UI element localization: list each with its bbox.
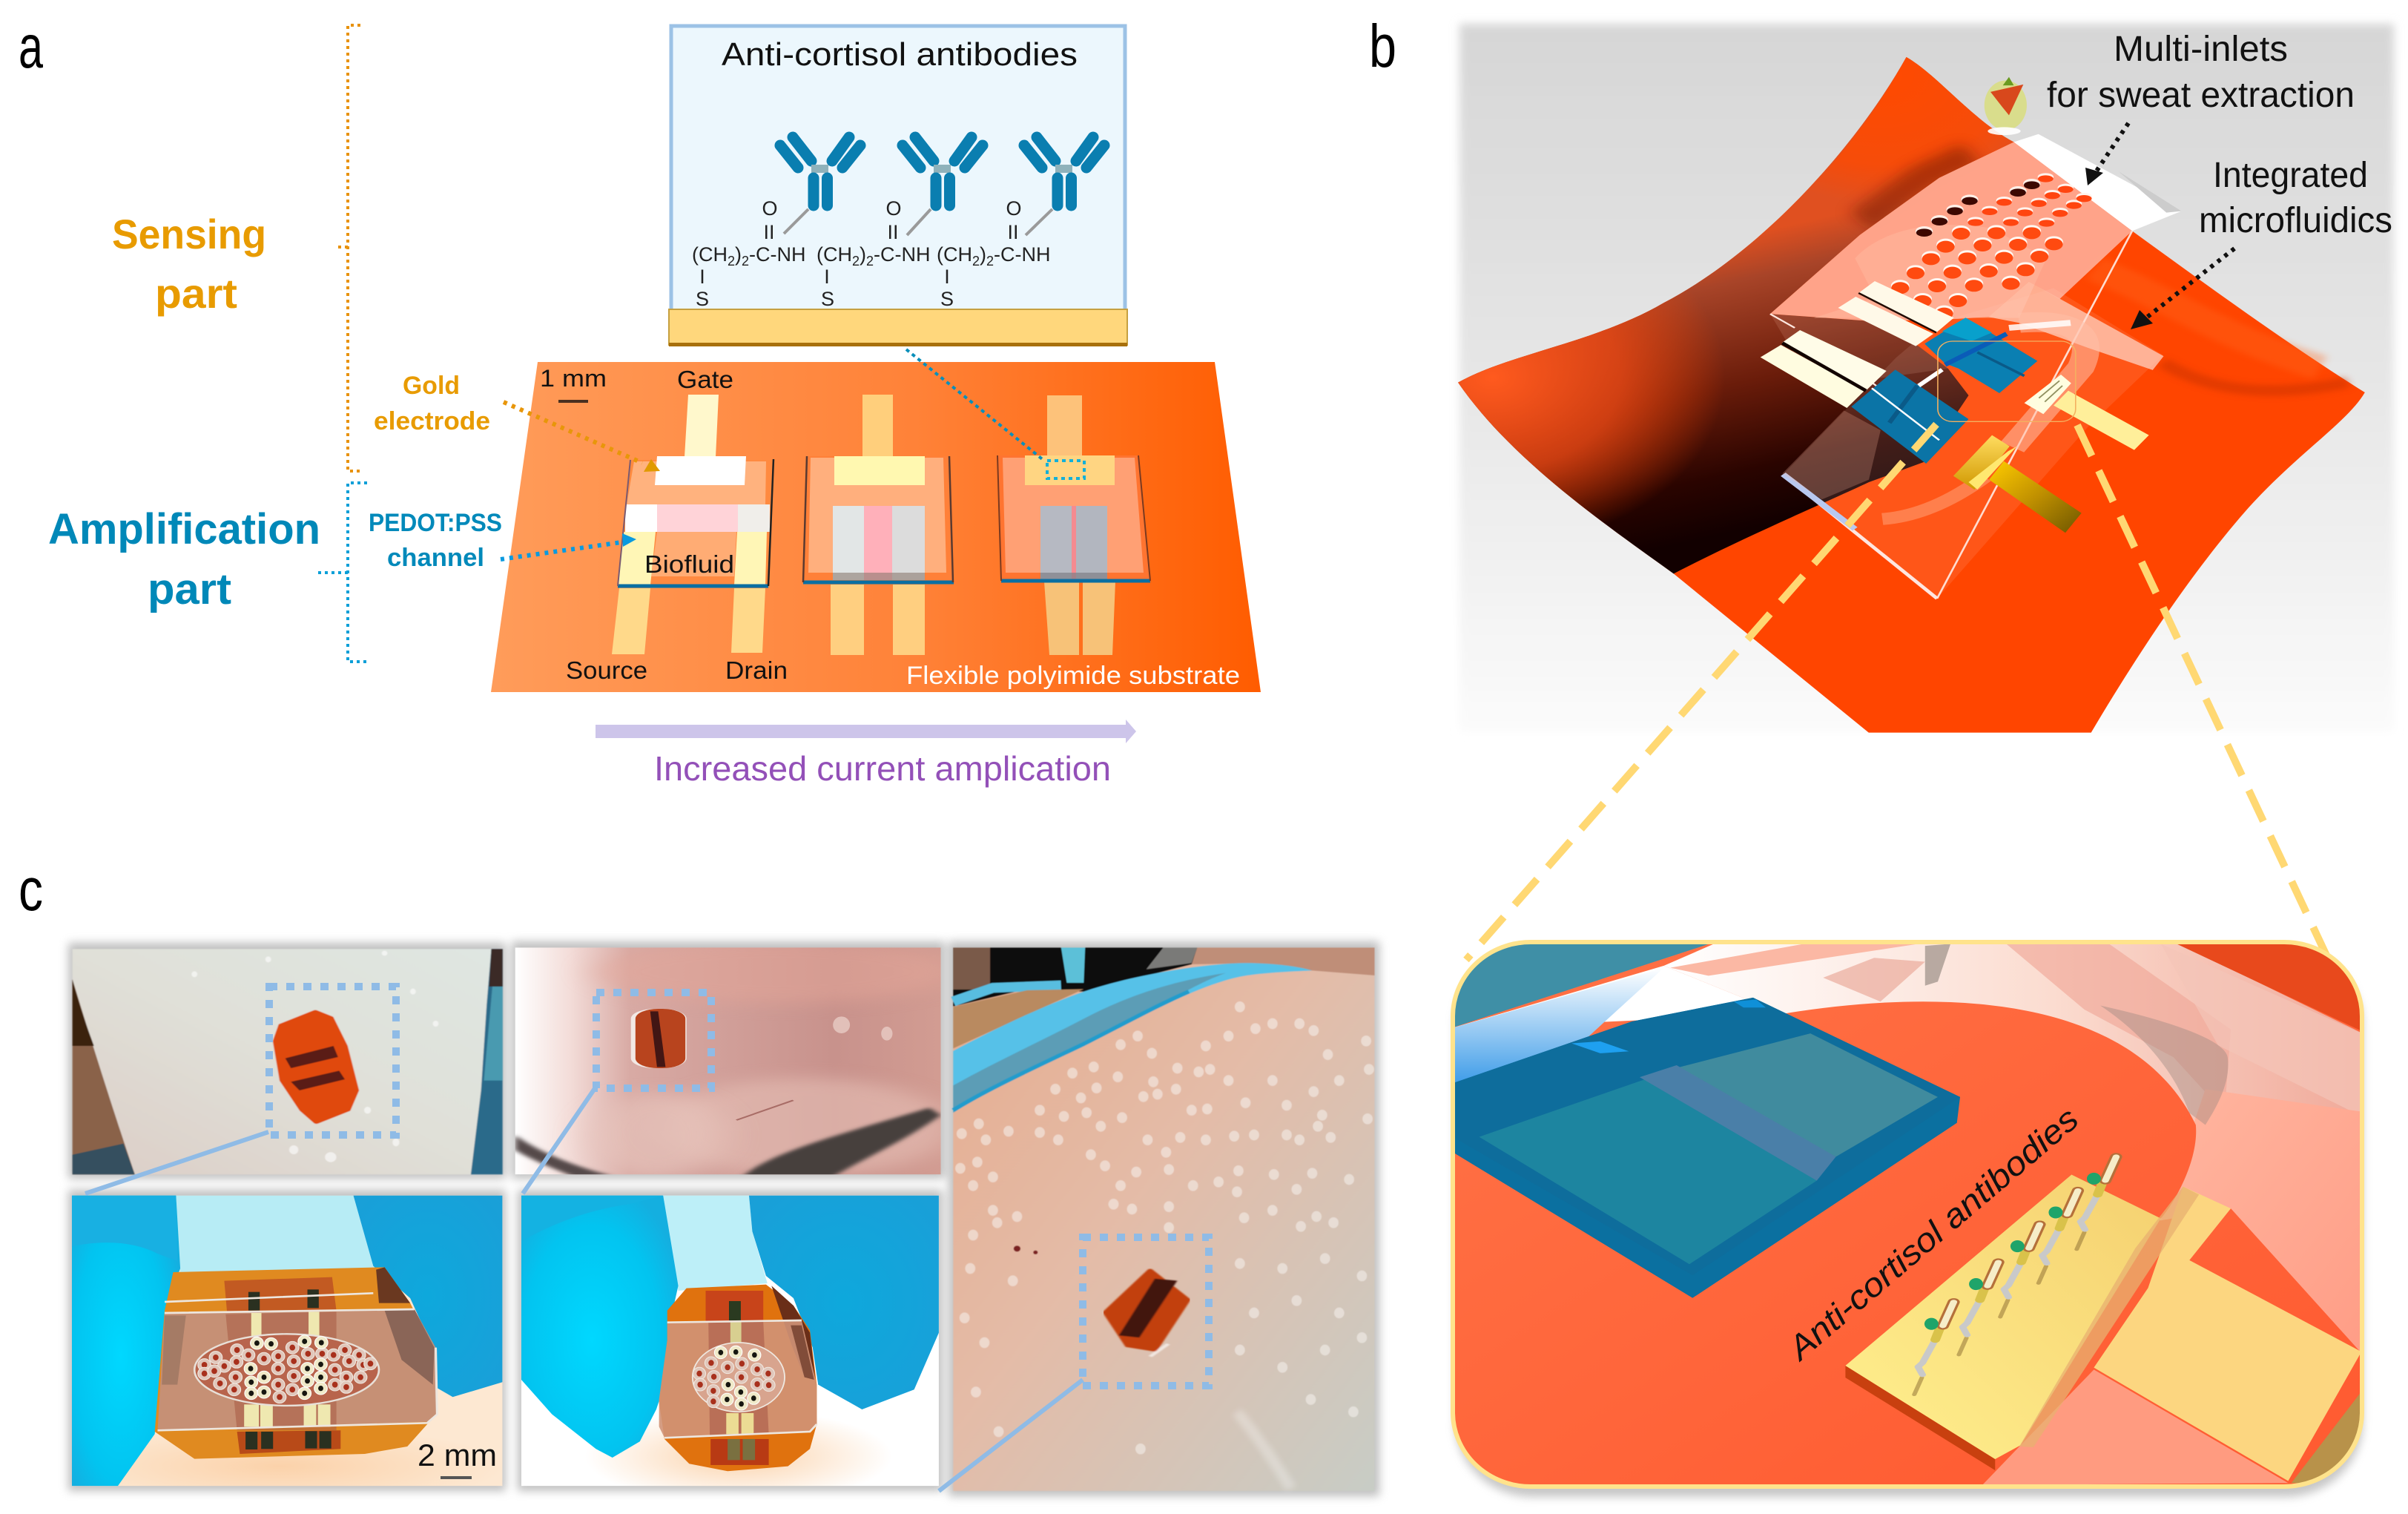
PEDOT:PSS label: PEDOT:PSS [369, 509, 502, 537]
amplification part heading: Amplification [48, 505, 320, 553]
multi-inlets label: Multi-inlets [2114, 30, 2288, 69]
photo 1: arm [73, 949, 503, 1174]
biofluid label: Biofluid [644, 550, 734, 578]
inlet holes [693, 1346, 775, 1410]
lower pink glass [1982, 1369, 2288, 1485]
source label: Source [566, 656, 647, 684]
sweat droplet icon [1985, 77, 2027, 135]
linker chemistry: S [940, 288, 954, 310]
linker chemistry: I [824, 266, 830, 288]
device 3 [997, 395, 1150, 655]
substrate label: Flexible polyimide substrate [906, 662, 1240, 690]
linker chemistry: -C-NH [994, 243, 1051, 266]
linker chemistry: O [885, 197, 902, 220]
linker chemistry: I [699, 266, 705, 288]
inset label: Anti-cortisol antibodies [1779, 1099, 2085, 1369]
sensing part bracket [335, 25, 360, 471]
inlet holes [198, 1335, 377, 1403]
gold electrode label: Gold [403, 372, 460, 400]
glass wall shading [2100, 1006, 2228, 1125]
blue PEDOT block [1448, 968, 1960, 1298]
current amplification arrow [596, 720, 1136, 743]
scale bar 1 mm: 1 mm [540, 365, 607, 392]
gold layer [669, 309, 1127, 346]
gate label: Gate [677, 366, 733, 393]
arrow: multi-inlets [2085, 123, 2128, 185]
amplification part bracket [314, 483, 367, 662]
linker chemistry: (CH [692, 243, 728, 266]
linker chemistry: ) [860, 243, 866, 266]
linker chemistry: ) [735, 243, 742, 266]
sensing part heading: part [155, 270, 237, 317]
teal waistband [953, 963, 1312, 1113]
dark gold corner [2292, 1394, 2360, 1484]
sweat droplets on skin [955, 1001, 1374, 1455]
panel label a: a [19, 13, 43, 81]
linker chemistry [692, 197, 1051, 310]
zoom lines to inset [1466, 424, 2326, 960]
gold sensing plate [1845, 1175, 2161, 1470]
integrated microfluidics label: Integrated [2213, 156, 2368, 195]
glass edge [2019, 1187, 2199, 1447]
panel c: photographs [53, 940, 1379, 1506]
linker chemistry: S [821, 288, 834, 310]
panel b inset: magnified sensor [1441, 938, 2371, 1497]
linker chemistry: 2 [866, 254, 874, 269]
linker chemistry: 2 [852, 254, 860, 269]
linker chemistry: 2 [972, 254, 980, 269]
linker chemistry: 2 [742, 254, 749, 269]
arrow: gold electrode [504, 402, 660, 472]
sensing part heading: Sensing [112, 211, 266, 257]
linker chemistry: ) [980, 243, 986, 266]
photo 3: back [953, 947, 1375, 1491]
linker chemistry: S [696, 288, 709, 310]
microfluidic film and glass [1770, 134, 2182, 599]
panel label b: b [1369, 13, 1396, 80]
microfluidic inlet holes [1891, 173, 2092, 320]
panel label c: c [19, 856, 43, 924]
photo 5: device held by gloved fingers [521, 1196, 939, 1504]
zoom callout from gate to antibody box [906, 349, 1084, 478]
electrodes, blue PEDOT pads and gold pads [1761, 281, 2149, 533]
right pink glass [2161, 1092, 2360, 1351]
linker chemistry: 2 [986, 254, 994, 269]
arrow: integrated microfluidics [2131, 249, 2234, 329]
linker chemistry: O [1006, 197, 1022, 220]
linker chemistry: -C-NH [874, 243, 931, 266]
dotted callout boxes and leader lines [85, 987, 1209, 1491]
linker chemistry: -C-NH [749, 243, 806, 266]
antibody icons [780, 137, 1104, 235]
photo 4: device held by gloved fingers [71, 1196, 503, 1487]
flexible sheet [1458, 57, 2365, 733]
arrow: PEDOT:PSS channel [501, 533, 636, 559]
upper teal and glass area [1448, 938, 2371, 1220]
integrated microfluidics label: microfluidics [2199, 201, 2392, 240]
inset artwork [1441, 938, 2371, 1491]
photo shadows [68, 941, 1379, 1496]
current amplification caption: Increased current amplication [654, 749, 1111, 788]
linker chemistry: O [762, 197, 778, 220]
linker chemistry: II [887, 221, 899, 243]
linker chemistry: (CH [817, 243, 852, 266]
inset frame [1453, 942, 2362, 1487]
linker chemistry: II [763, 221, 775, 243]
antibody box title: Anti-cortisol antibodies [722, 36, 1078, 73]
amplification part heading: part [148, 565, 231, 613]
multi-inlets label: for sweat extraction [2047, 76, 2355, 115]
antibody box [669, 26, 1127, 346]
top dark background and straps [953, 947, 1375, 1048]
photo 2: forehead [515, 940, 958, 1177]
orange surface with curved glass boundary [1589, 1001, 2197, 1218]
PEDOT:PSS label: channel [387, 544, 484, 572]
linker chemistry: I [944, 266, 950, 288]
device 1 [612, 395, 773, 654]
panel b: 3D device rendering [1458, 24, 2394, 733]
linker chemistry: II [1007, 221, 1019, 243]
inset shadow [1455, 951, 2363, 1497]
flexible substrate [491, 362, 1261, 692]
linker chemistry: 2 [728, 254, 735, 269]
grey backdrop [1459, 24, 2394, 731]
immobilised antibody pins [1914, 1156, 2116, 1395]
drain label: Drain [725, 656, 788, 684]
linker chemistry: (CH [937, 243, 972, 266]
scale bar 1 mm [540, 365, 607, 403]
device 2 [803, 395, 954, 655]
gold contact [2094, 1187, 2361, 1481]
scale bar 2 mm: 2 mm [418, 1438, 497, 1472]
back device patch [1105, 1270, 1188, 1357]
gold electrode label: electrode [374, 407, 490, 435]
panel a: device schematic [48, 25, 1261, 788]
